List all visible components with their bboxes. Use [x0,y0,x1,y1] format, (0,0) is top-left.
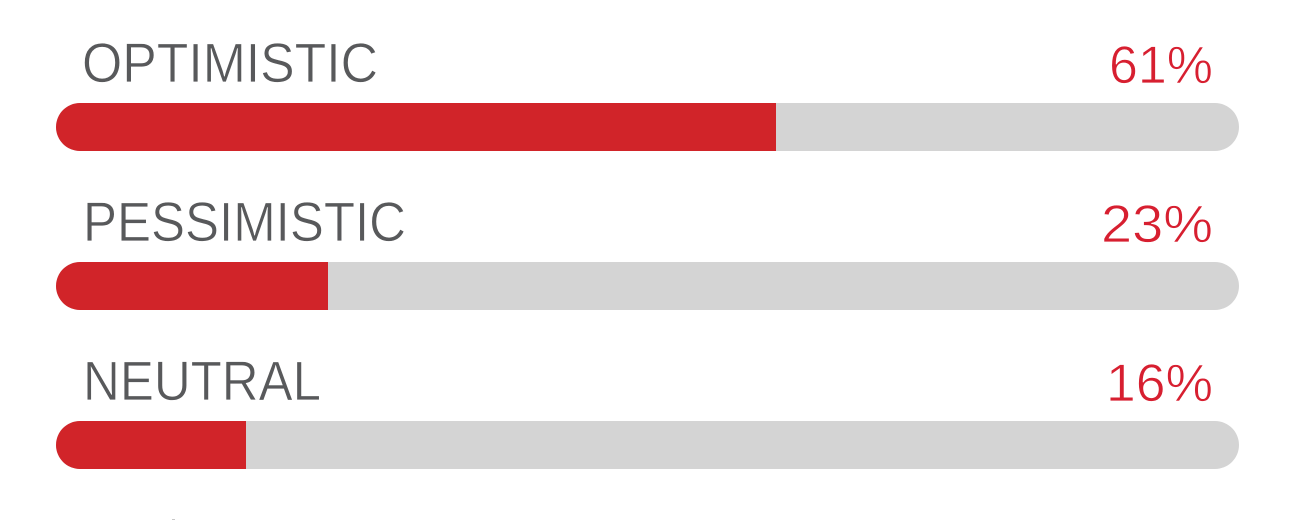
panel: optimistic row [56,31,1239,151]
bar: neutral 16% [56,421,1239,469]
bar: optimistic 61% [56,103,1239,151]
panel: neutral row [56,349,1239,469]
panel: pessimistic row [56,190,1239,310]
value: 16%: 16% [1106,354,1213,413]
label: optimistic: OPTIMISTIC [82,31,378,94]
bar: pessimistic 23% [56,262,1239,310]
value: 23%: 23% [1101,195,1213,254]
value: 61%: 61% [1109,36,1213,95]
label: neutral: NEUTRAL [83,349,321,412]
label: pessimistic: PESSIMISTIC [83,190,406,253]
